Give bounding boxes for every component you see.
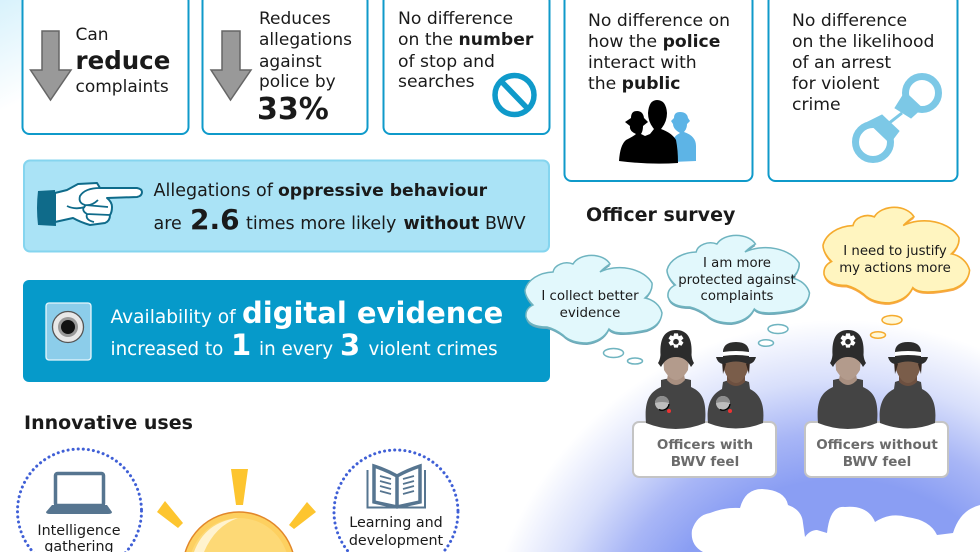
text: reduces allegations 33%: against xyxy=(259,52,322,72)
text: allegations 2.6 times: without xyxy=(404,214,479,234)
text: no difference on arrest: crime xyxy=(792,95,841,115)
icon: handcuffs xyxy=(856,76,938,160)
text: availability of digital evidence: violent crimes xyxy=(368,339,498,360)
text: no difference on interaction: interact with xyxy=(588,53,697,73)
text: officers with BWV feel: BWV feel xyxy=(671,454,739,470)
text: collect better evidence xyxy=(541,289,639,321)
panel: officers without BWV xyxy=(805,330,948,477)
text: availability of digital evidence: increased to xyxy=(110,339,223,360)
icon: open book xyxy=(368,466,425,508)
text: no difference on arrest: of an arrest xyxy=(792,53,891,73)
text: no difference stop and search: searches xyxy=(398,72,475,92)
text: reduces allegations 33%: Reduces xyxy=(259,9,331,29)
text: no difference on interaction xyxy=(588,11,730,94)
text: reduces allegations 33%: 33% xyxy=(257,92,329,127)
callout: oppressive behaviour xyxy=(24,160,549,252)
text: need to justify: my actions more xyxy=(839,261,951,276)
icon: down arrow xyxy=(211,31,251,100)
text: allegations 2.6 times xyxy=(154,181,526,236)
text: availability of digital evidence xyxy=(110,296,503,362)
callout: digital evidence xyxy=(23,280,550,382)
text: can reduce complaints xyxy=(76,25,170,97)
icon: down arrow xyxy=(30,31,71,100)
callout: thought cloud justify actions xyxy=(823,207,970,338)
icon: pointing hand xyxy=(37,183,142,226)
panel: stop and searches xyxy=(384,0,550,134)
panel: learning and development xyxy=(334,450,458,552)
text: no difference stop and search: No difference xyxy=(398,9,513,29)
text: allegations 2.6 times: 2.6 xyxy=(190,203,240,236)
text: allegations 2.6 times: times more likely xyxy=(246,214,396,234)
cloud: bottom centre xyxy=(442,531,505,552)
text: more protected against complaints xyxy=(678,256,796,304)
text: collect better evidence: evidence xyxy=(560,306,620,321)
icon: prohibited sign xyxy=(495,76,534,114)
text: more protected against complaints: I am more xyxy=(703,256,771,271)
text: no difference on arrest: for violent xyxy=(792,74,880,94)
heading: innovative uses: Innovative uses xyxy=(24,412,193,434)
text: reduces allegations 33% xyxy=(257,9,352,127)
text: officers with BWV feel xyxy=(657,437,753,470)
text: availability of digital evidence: digital evidence xyxy=(242,296,503,330)
cloud: bottom right xyxy=(692,489,980,552)
text: learning and development: development xyxy=(349,533,444,549)
text: need to justify xyxy=(839,244,951,276)
panel: arrest for violent crime xyxy=(768,0,958,181)
text: need to justify: I need to justify xyxy=(843,244,947,259)
text: more protected against complaints: protected against xyxy=(678,273,796,288)
text: no difference stop and search: of stop and xyxy=(398,52,495,72)
text: allegations 2.6 times: are xyxy=(154,214,182,234)
text: reduces allegations 33%: police by xyxy=(259,72,336,92)
text: more protected against complaints: complaints xyxy=(701,289,774,304)
callout: thought cloud collect better evidence xyxy=(525,255,662,364)
text: collect better evidence: I collect better xyxy=(541,289,639,304)
text: no difference on interaction: No difference on xyxy=(588,11,730,31)
icon: public silhouettes xyxy=(619,100,696,164)
text: intelligence gathering xyxy=(37,523,121,552)
text: no difference on interaction: the public xyxy=(588,74,680,94)
icon: light bulb xyxy=(157,469,316,552)
text: intelligence gathering: Intelligence xyxy=(37,523,121,539)
text: can reduce complaints: reduce xyxy=(76,46,170,75)
text: no difference on interaction: how the police xyxy=(588,32,720,52)
panel: reduces allegations xyxy=(202,0,368,134)
panel: intelligence gathering xyxy=(18,449,142,552)
text: availability of digital evidence: 3 xyxy=(340,328,360,362)
callout: thought cloud more protected xyxy=(667,235,809,346)
text: no difference on arrest: on the likelihood xyxy=(792,32,934,52)
text: allegations 2.6 times: Allegations of xyxy=(154,181,273,201)
text: allegations 2.6 times: BWV xyxy=(485,214,526,234)
text: officers with BWV feel: Officers with xyxy=(657,437,753,453)
text: availability of digital evidence: in every xyxy=(259,339,333,360)
text: reduces allegations 33%: allegations xyxy=(259,30,352,50)
text: learning and development xyxy=(349,515,444,549)
panel: police interact with public xyxy=(564,0,752,181)
text: no difference on arrest xyxy=(792,11,934,115)
text: allegations 2.6 times: oppressive behaviour xyxy=(278,181,488,201)
text: no difference stop and search xyxy=(398,9,534,92)
icon: laptop xyxy=(46,474,112,514)
panel: officers with BWV xyxy=(633,330,776,477)
text: can reduce complaints: Can xyxy=(76,25,109,45)
text: learning and development: Learning and xyxy=(349,515,443,531)
text: officers without BWV feel: Officers without xyxy=(816,437,938,453)
text: availability of digital evidence: 1 xyxy=(231,328,251,362)
text: officers without BWV feel xyxy=(816,437,938,470)
text: no difference on arrest: No difference xyxy=(792,11,907,31)
text: can reduce complaints: complaints xyxy=(76,77,169,97)
heading: officer survey: Officer survey xyxy=(586,204,736,226)
panel: can reduce complaints xyxy=(22,0,188,134)
text: availability of digital evidence: Availability of xyxy=(110,307,236,328)
icon: body camera xyxy=(46,303,91,360)
text: officers without BWV feel: BWV feel xyxy=(843,454,911,470)
text: no difference stop and search: on the number xyxy=(398,30,534,50)
